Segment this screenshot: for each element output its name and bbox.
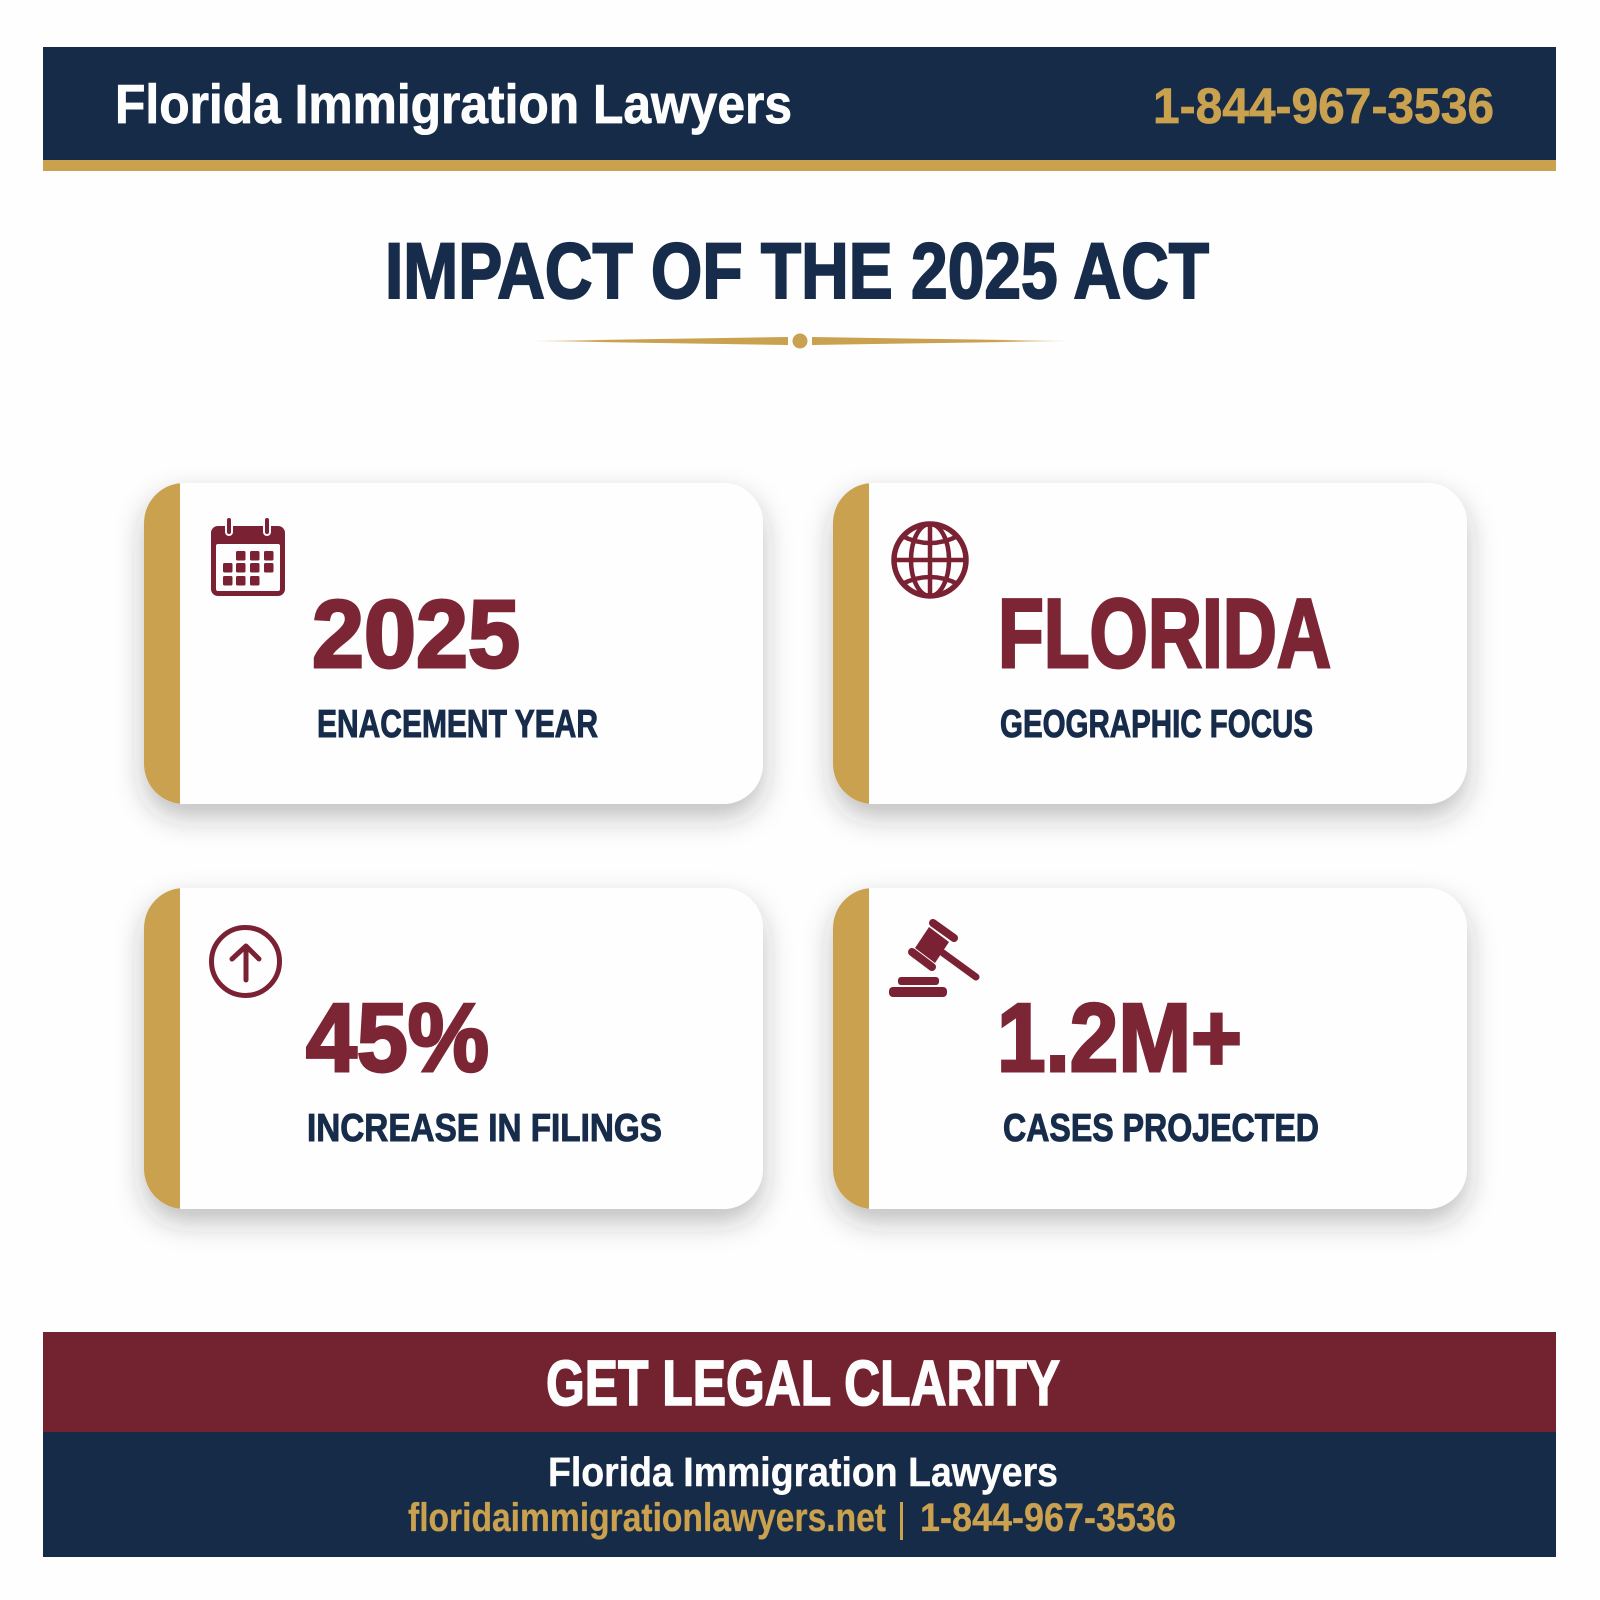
icon: up arrow in circle <box>212 928 280 996</box>
label: cases projected: CASES PROJECTED <box>1003 1107 1319 1150</box>
stat: florida: FLORIDA <box>998 578 1331 688</box>
header firm name: Florida Immigration Lawyers <box>115 73 792 135</box>
title: IMPACT OF THE 2025 ACT <box>385 226 1209 315</box>
panel: geographic focus <box>833 483 1467 804</box>
footer call to action band <box>43 1332 1556 1432</box>
icon: globe <box>894 524 966 596</box>
stat: 1.2M+: 1.2M+ <box>997 983 1242 1092</box>
icon: calendar <box>211 520 285 596</box>
panel: increase in filings <box>144 888 763 1209</box>
label: enacement year: ENACEMENT YEAR <box>317 703 598 746</box>
panel: cases projected <box>833 888 1467 1209</box>
footer contact band <box>43 1432 1556 1557</box>
call to action heading: GET LEGAL CLARITY <box>546 1347 1060 1419</box>
label: geographic focus: GEOGRAPHIC FOCUS <box>1000 703 1313 746</box>
footer website and phone: 1-844-967-3536 <box>920 1496 1176 1540</box>
header bar <box>43 47 1556 171</box>
header phone number: 1-844-967-3536 <box>1153 78 1494 134</box>
stat: 2025: 2025 <box>312 581 520 688</box>
footer website and phone: floridaimmigrationlawyers.net <box>408 1496 886 1540</box>
footer firm name: Florida Immigration Lawyers <box>548 1449 1058 1495</box>
stat: 45%: 45% <box>306 983 489 1092</box>
label: increase in filings: INCREASE IN FILINGS <box>307 1107 662 1150</box>
icon: gavel <box>889 923 976 997</box>
panel: enactment year <box>144 483 763 804</box>
title divider <box>530 334 1071 348</box>
